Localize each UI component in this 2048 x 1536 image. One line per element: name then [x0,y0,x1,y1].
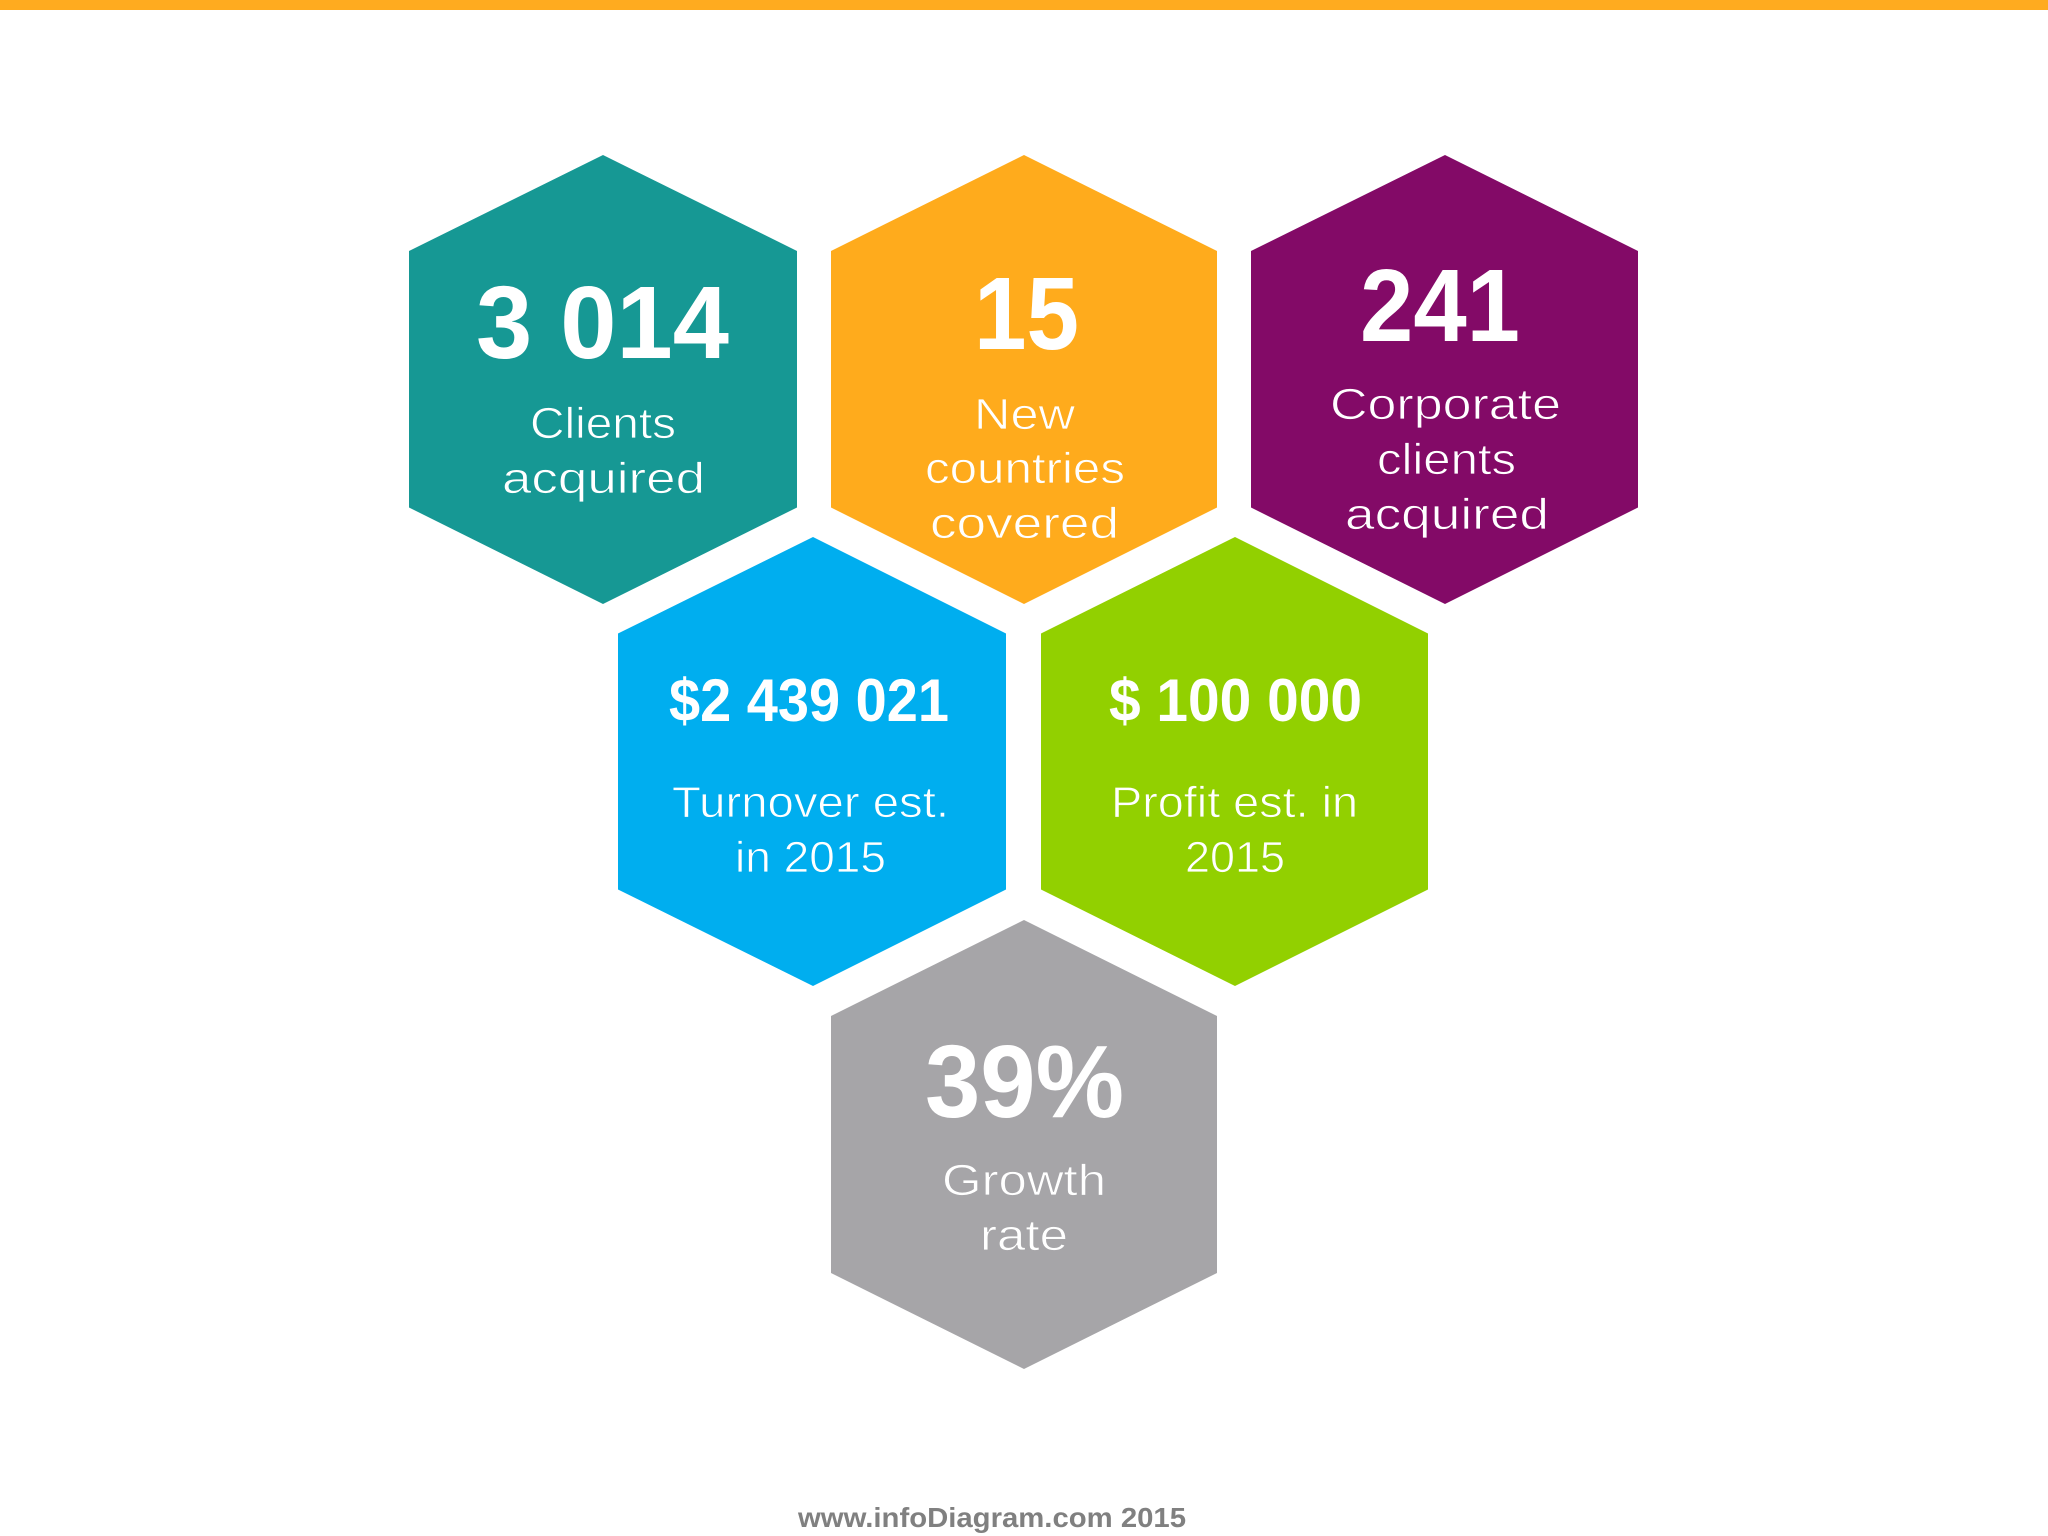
panel: clients acquired hexagon: acquired [502,454,705,503]
top accent bar [0,0,2048,10]
panel: growth rate hexagon [831,920,1217,1369]
panel: turnover hexagon: Turnover est. [672,778,949,827]
footer credit: www.infoDiagram.com 2015 [797,1502,1186,1533]
panel: turnover hexagon: in 2015 [735,833,886,882]
panel: profit hexagon: Profit est. in [1111,778,1358,827]
panel: clients acquired hexagon: 3 014 [476,265,729,380]
panel: clients acquired hexagon: Clients [530,399,676,448]
panel: profit hexagon: $ 100 000 [1109,667,1362,734]
panel: turnover hexagon: $2 439 021 [669,667,949,734]
panel: new countries covered hexagon: 15 [974,256,1079,371]
panel: growth rate hexagon: 39% [925,1024,1124,1139]
panel: corporate clients acquired hexagon: Corporate [1330,380,1561,429]
panel: new countries covered hexagon: covered [930,499,1119,548]
panel: turnover hexagon [618,537,1006,986]
panel: growth rate hexagon: rate [980,1211,1068,1260]
panel: new countries covered hexagon: countries [925,444,1125,493]
panel: new countries covered hexagon: New [974,390,1075,439]
panel: corporate clients acquired hexagon [1251,155,1638,604]
panel: corporate clients acquired hexagon: acquired [1345,490,1549,539]
panel: corporate clients acquired hexagon: 241 [1360,248,1520,363]
panel: clients acquired hexagon [409,155,797,604]
panel: profit hexagon [1041,537,1428,986]
panel: profit hexagon: 2015 [1185,833,1285,882]
panel: new countries covered hexagon [831,155,1217,604]
panel: growth rate hexagon: Growth [942,1156,1106,1205]
panel: corporate clients acquired hexagon: clients [1377,435,1516,484]
